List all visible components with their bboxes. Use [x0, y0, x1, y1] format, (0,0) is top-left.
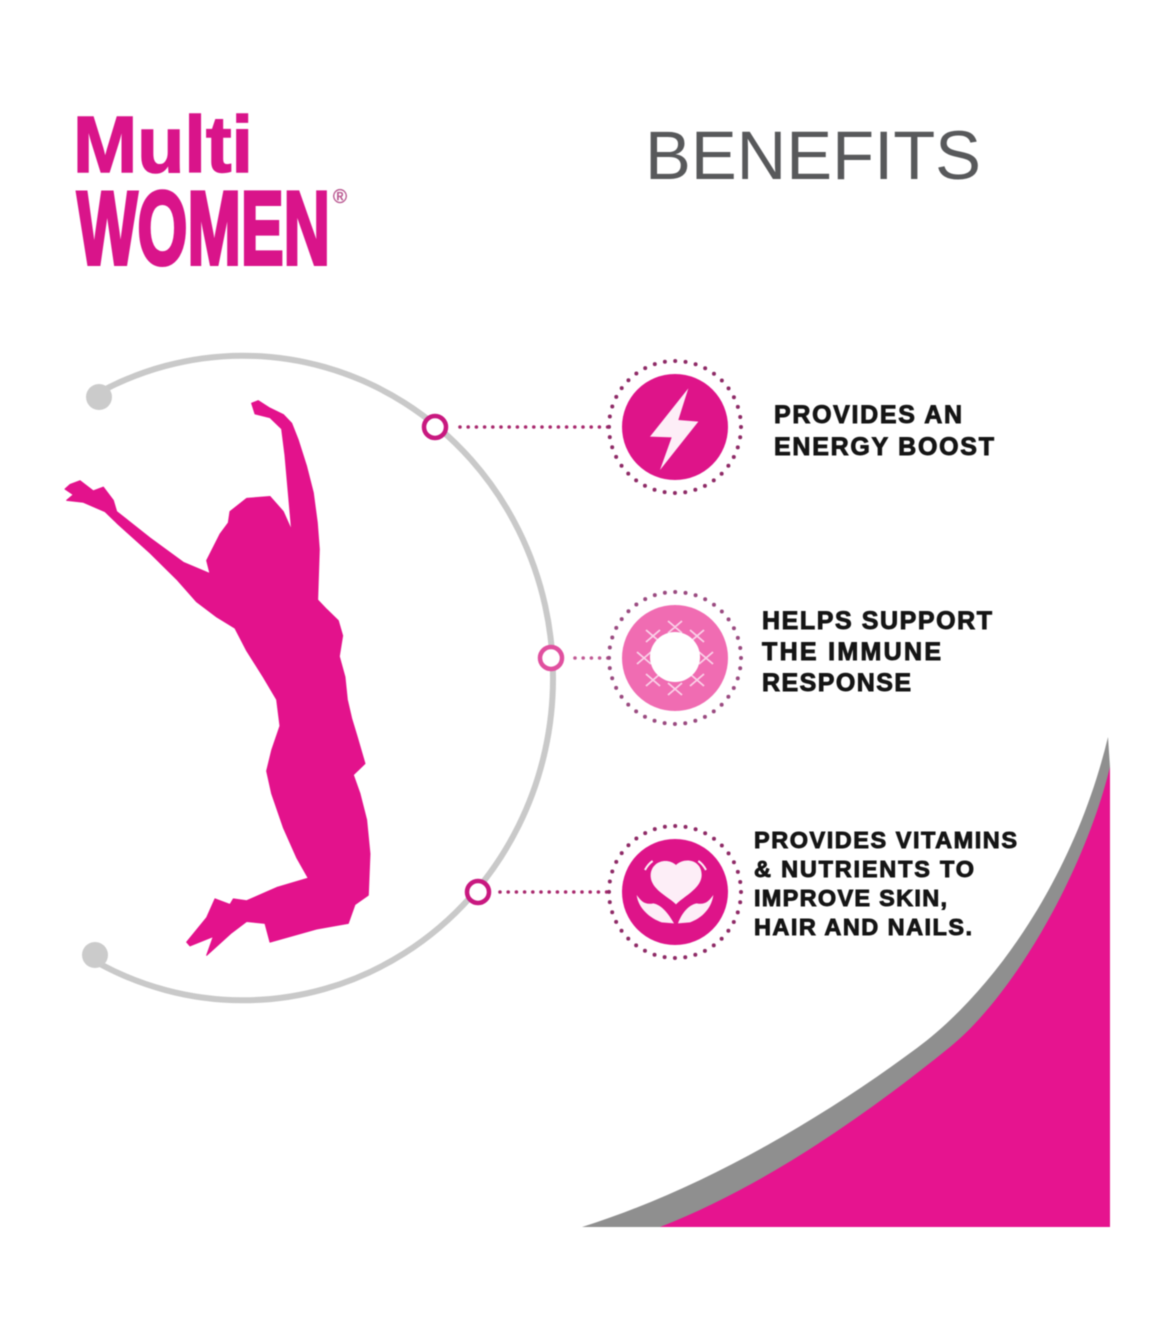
icon: lightning energy [609, 361, 741, 493]
text: energy boost [774, 401, 994, 461]
text: vitamins and nutrients: HAIR AND NAILS. [754, 914, 972, 940]
text: immune response [762, 607, 992, 697]
text: vitamins and nutrients: & NUTRIENTS TO [754, 856, 974, 882]
text: energy boost: ENERGY BOOST [774, 433, 994, 461]
grey arc with end dots [82, 356, 553, 1000]
icon: heart and hands [609, 826, 741, 958]
text: immune response: RESPONSE [762, 669, 911, 697]
text: vitamins and nutrients [754, 827, 1017, 940]
connector 1: node and dotted line [424, 416, 610, 438]
text: vitamins and nutrients: PROVIDES VITAMINS [754, 827, 1017, 853]
brand logo: Multi WOMEN [73, 100, 347, 287]
icon: immune snowflakes [609, 592, 741, 724]
text: immune response: HELPS SUPPORT [762, 607, 992, 635]
brand logo: Multi WOMEN: ® [333, 187, 347, 208]
corner swoosh: grey and magenta [582, 737, 1110, 1227]
brand logo: Multi WOMEN: WOMEN [77, 171, 330, 287]
woman jumping silhouette [65, 401, 370, 955]
text: energy boost: PROVIDES AN [774, 401, 962, 429]
heading: benefits: BENEFITS [645, 117, 981, 194]
text: vitamins and nutrients: IMPROVE SKIN, [754, 885, 947, 911]
brand logo: Multi WOMEN: Multi [73, 100, 253, 189]
connector 2: node and dotted line [540, 647, 610, 669]
text: immune response: THE IMMUNE [762, 638, 941, 666]
connector 3: node and dotted line [467, 881, 610, 903]
